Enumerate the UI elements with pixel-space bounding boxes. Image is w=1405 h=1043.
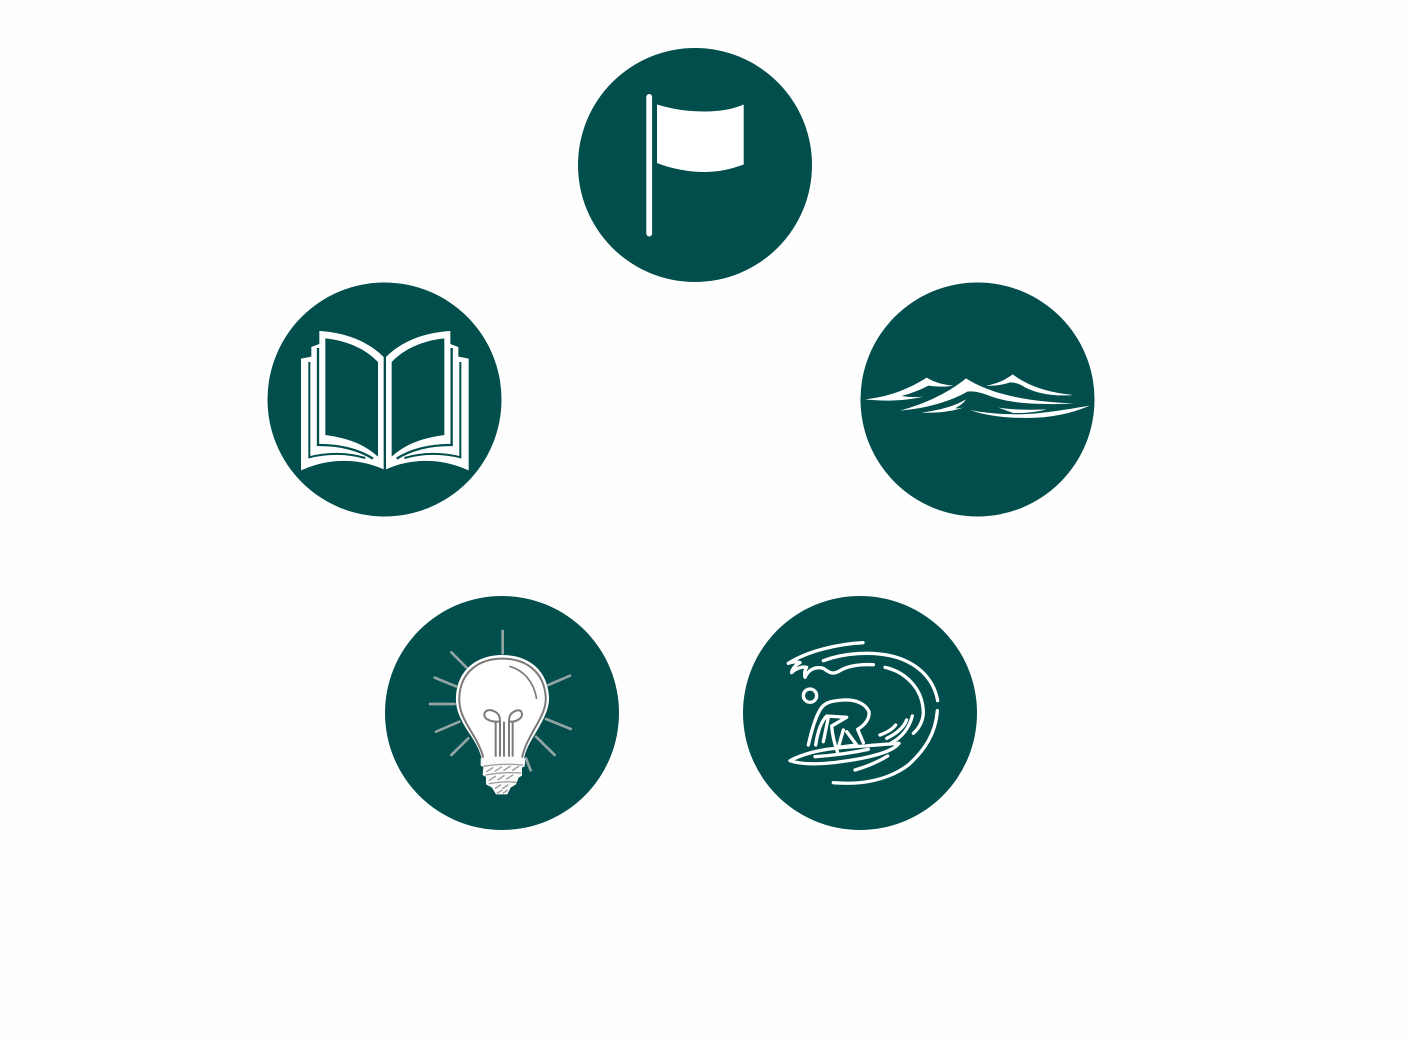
icon: ocean waves	[860, 282, 1094, 516]
icon: surfer on a wave	[743, 596, 977, 830]
icon: flag	[578, 48, 812, 282]
icon: light bulb	[385, 596, 619, 830]
icon: open book	[268, 282, 501, 516]
